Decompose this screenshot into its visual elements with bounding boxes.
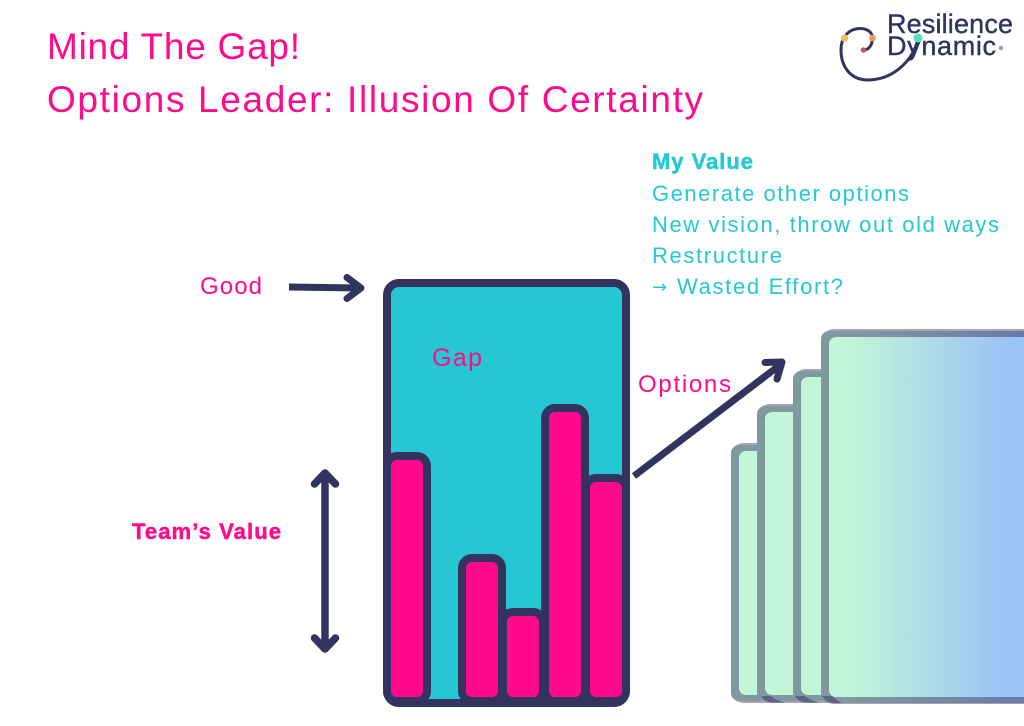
bar 2 <box>462 558 502 701</box>
gap container <box>387 283 626 703</box>
arrow: good <box>289 278 361 298</box>
label: Team's Value: Team’s Value <box>132 519 281 544</box>
logo: Resilience Dynamic: Dynamic <box>887 31 996 61</box>
bar 5 <box>586 478 626 701</box>
bar 3 <box>503 612 543 701</box>
panel: stacked option cards <box>731 329 1024 704</box>
title: Mind The Gap! <box>47 26 300 67</box>
text block: my value: → <box>652 277 667 298</box>
logo: Resilience Dynamic <box>841 9 1013 80</box>
text block: my value: Wasted Effort? <box>677 274 843 299</box>
title <box>47 26 704 120</box>
title: Options Leader: Illusion Of Certainty <box>47 79 704 120</box>
panel: gap bar chart <box>387 283 626 703</box>
arrow: options <box>634 362 782 476</box>
logo: Resilience Dynamic: Resilience <box>887 9 1013 39</box>
bar 4 <box>545 408 585 701</box>
label: Options: Options <box>638 371 731 398</box>
card 4 <box>821 329 1024 704</box>
label: Good: Good <box>200 273 262 300</box>
card 1 <box>731 443 791 703</box>
arrow: team's value range <box>314 473 336 649</box>
text block: my value <box>652 149 999 299</box>
text block: my value: Generate other options <box>652 181 909 206</box>
text block: my value: My Value <box>652 149 753 174</box>
bar 1 <box>387 456 427 701</box>
text block: my value: Restructure <box>652 243 782 268</box>
card 2 <box>757 404 817 703</box>
card 3 <box>793 369 853 703</box>
label: Gap: Gap <box>432 344 482 372</box>
text block: my value: New vision, throw out old ways <box>652 212 999 237</box>
